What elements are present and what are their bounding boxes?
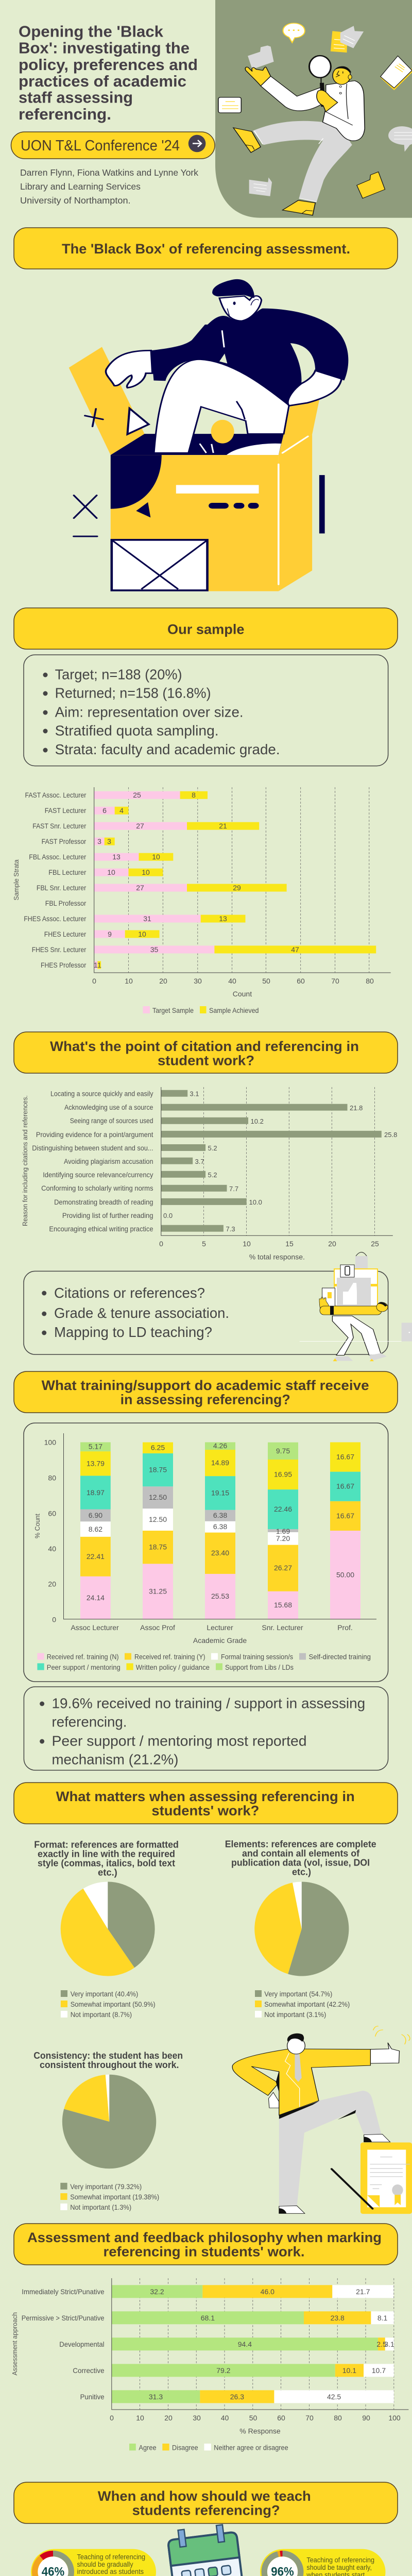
panel: training stacked bar chart: 16.67 — [336, 1453, 354, 1461]
panel: consistency pie: Very important (79.32%) — [70, 2182, 142, 2191]
panel: format pie: Not important (8.7%) — [71, 2010, 132, 2019]
bar chart: reasons for referencing: 0.0 — [163, 1212, 173, 1219]
panel: training stacked bar chart: Prof. — [337, 1623, 353, 1632]
bar chart: sample strata: FHES Lecturer — [44, 930, 87, 938]
title: referencing. — [19, 105, 111, 123]
bar chart: sample strata: 1 — [94, 961, 98, 969]
bar chart: reasons for referencing: 0 — [159, 1240, 163, 1248]
panel: training stacked bar chart: 7.20 — [276, 1534, 290, 1543]
stacked bar chart: assessment philosophy: 94.4 — [238, 2340, 252, 2348]
panel: training stacked bar chart: 50.00 — [336, 1570, 354, 1579]
stacked bar chart: assessment philosophy: 70 — [305, 2414, 314, 2422]
illustration: man giving thumbs up — [232, 2026, 412, 2214]
panel: elements pie: Not important (3.1%) — [264, 2010, 326, 2019]
panel: training stacked bar chart: 0 — [52, 1616, 56, 1624]
stat pill: gradually introduced 46%: should be gradually — [77, 2561, 133, 2568]
bar chart: reasons for referencing: 20 — [328, 1240, 336, 1248]
bar chart: reasons for referencing: 10.2 — [250, 1117, 264, 1125]
stacked bar chart: assessment philosophy: 50 — [249, 2414, 257, 2422]
bar chart: reasons for referencing: Encouraging ethical writing practice — [49, 1225, 153, 1233]
bar chart: reasons for referencing: 5.2 — [208, 1144, 217, 1152]
conference pill — [11, 132, 215, 159]
bar chart: sample strata: 20 — [159, 977, 167, 985]
bar chart: reasons for referencing: Reason for including citations and references. — [22, 1095, 29, 1226]
stat pill: taught early 96%: Teaching of referencing — [306, 2556, 374, 2564]
title: policy, preferences and — [19, 56, 198, 74]
panel: training stacked bar chart: 22.41 — [87, 1552, 105, 1561]
stacked bar chart: assessment philosophy: 8.1 — [377, 2314, 388, 2322]
panel: format pie — [34, 1839, 179, 2019]
bar chart: sample strata: 27 — [136, 884, 144, 892]
bar chart: reasons for referencing: 25 — [371, 1240, 379, 1248]
bar chart: sample strata: 4 — [119, 806, 124, 815]
bar chart: sample strata: 8 — [192, 791, 196, 799]
bar chart: sample strata: Count — [233, 990, 252, 998]
title: staff assessing — [19, 89, 133, 107]
stacked bar chart: assessment philosophy: 100 — [388, 2414, 401, 2422]
panel: training stacked bar chart: 40 — [48, 1545, 56, 1553]
stacked bar chart: assessment philosophy: Punitive — [80, 2393, 105, 2401]
stacked bar chart: assessment philosophy: 10.1 — [342, 2366, 356, 2375]
stacked bar chart: assessment philosophy: 20 — [164, 2414, 173, 2422]
stacked bar chart: assessment philosophy: 32.2 — [150, 2287, 164, 2296]
panel: training stacked bar chart: 80 — [48, 1473, 56, 1482]
legend: Self-directed training — [309, 1653, 371, 1661]
panel: consistency pie: Not important (1.3%) — [70, 2203, 131, 2211]
heading: our sample: Our sample — [167, 622, 244, 637]
bar chart: sample strata: 25 — [133, 791, 141, 799]
bar chart: reasons for referencing: Distinguishing between student and sou... — [32, 1144, 153, 1152]
stacked bar chart: assessment philosophy: 68.1 — [201, 2314, 215, 2322]
stacked bar chart: assessment philosophy: Immediately Strict/Punative — [22, 2287, 105, 2296]
bar chart: sample strata: FAST Lecturer — [45, 806, 87, 815]
title — [19, 23, 198, 123]
bar chart: sample strata: 0 — [92, 977, 96, 985]
panel: training stacked bar chart: 6.90 — [89, 1511, 102, 1519]
heading: training and support: What training/support do academic staff receive — [42, 1378, 369, 1393]
bar chart: reasons for referencing: Demonstrating breadth of reading — [54, 1198, 153, 1206]
bar chart: reasons for referencing: Seeing range of sources used — [70, 1116, 153, 1125]
stacked bar chart: assessment philosophy: 60 — [277, 2414, 285, 2422]
panel: format pie: Very important (40.4%) — [71, 1990, 138, 1998]
bar chart: reasons for referencing: 7.7 — [229, 1185, 238, 1193]
heading: assessment philosophy — [14, 2224, 398, 2265]
bar chart: sample strata: FAST Snr. Lecturer — [32, 822, 87, 830]
panel: training stacked bar chart: 18.75 — [149, 1465, 167, 1473]
authors — [20, 167, 198, 206]
panel: training stacked bar chart: Assoc Prof — [140, 1623, 175, 1632]
bar chart: sample strata: 3 — [97, 837, 101, 845]
panel: training stacked bar chart: Academic Grade — [193, 1636, 247, 1645]
panel: training bullets: 19.6% received no training / support in assessing — [52, 1695, 365, 1711]
panel: elements pie — [225, 1839, 376, 2019]
panel: training stacked bar chart: % Count — [34, 1514, 41, 1538]
bar chart: sample strata: FHES Assoc. Lecturer — [24, 914, 87, 923]
panel: elements pie: Elements: references are complete — [225, 1839, 376, 1850]
illustration: man with magnifier — [218, 23, 412, 215]
authors: University of Northampton. — [20, 195, 131, 206]
bar chart: reasons for referencing: 3.1 — [190, 1090, 199, 1097]
bar chart: sample strata: 40 — [228, 977, 236, 985]
stacked bar chart: assessment philosophy: 23.8 — [331, 2314, 345, 2322]
bar chart: reasons for referencing: 10.0 — [249, 1198, 262, 1206]
panel: training stacked bar chart: 12.50 — [149, 1515, 167, 1523]
title: practices of academic — [19, 72, 186, 90]
stacked bar chart: assessment philosophy: 90 — [362, 2414, 370, 2422]
bar chart: sample strata: 27 — [136, 822, 144, 830]
bar chart: sample strata: Sample Achieved — [209, 1006, 259, 1014]
bar chart: sample strata: 60 — [297, 977, 305, 985]
bar chart: reasons for referencing: 21.8 — [350, 1104, 363, 1112]
bar chart: reasons for referencing: 5 — [202, 1240, 206, 1248]
bar chart: sample strata: FHES Professor — [41, 961, 87, 969]
bar chart: sample strata: FHES Snr. Lecturer — [32, 945, 87, 954]
panel: consistency pie — [33, 2050, 183, 2211]
stacked bar chart: assessment philosophy: 30 — [193, 2414, 201, 2422]
stacked bar chart: assessment philosophy: 40 — [221, 2414, 229, 2422]
bar chart: sample strata: FAST Professor — [42, 837, 87, 845]
bar chart: reasons for referencing: Conforming to scholarly writing norms — [41, 1184, 153, 1192]
heading: when and how to teach: When and how should we teach — [98, 2488, 311, 2504]
bar chart: reasons for referencing — [22, 1087, 397, 1261]
heading: when and how to teach — [14, 2482, 398, 2523]
heading: what matters: students' work? — [151, 1803, 259, 1819]
panel: sample bullets: Target; n=188 (20%) — [55, 666, 182, 682]
bar chart: sample strata: 10 — [142, 868, 150, 876]
panel: citation bullets: Mapping to LD teaching? — [54, 1324, 212, 1340]
bar chart: reasons for referencing: 15 — [285, 1240, 294, 1248]
bar chart: sample strata: FBL Lecturer — [48, 868, 87, 876]
panel: training stacked bar chart: 22.46 — [274, 1505, 292, 1513]
title: Box': investigating the — [19, 39, 190, 57]
heading: training and support — [14, 1371, 398, 1413]
panel: training bullets: referencing. — [52, 1714, 127, 1730]
panel: consistency pie: Somewhat important (19.38%) — [70, 2193, 159, 2201]
title: Opening the 'Black — [19, 23, 164, 40]
bar chart: sample strata: 13 — [219, 914, 227, 923]
legend: Peer support / mentoring — [47, 1663, 121, 1671]
heading: point of citation: student work? — [158, 1053, 254, 1069]
panel: training stacked bar chart — [24, 1423, 388, 1682]
panel: training stacked bar chart: 16.95 — [274, 1470, 292, 1479]
bar chart: sample strata: FBL Snr. Lecturer — [37, 884, 87, 892]
panel: training stacked bar chart: 9.75 — [276, 1447, 290, 1455]
panel: citation bullets: Citations or references? — [54, 1285, 205, 1301]
stat pill: gradually introduced 46%: Teaching of referencing — [77, 2553, 145, 2561]
bar chart: reasons for referencing: 5.2 — [208, 1171, 217, 1179]
stacked bar chart: assessment philosophy: 10 — [136, 2414, 144, 2422]
stat pill: taught early 96%: should be taught early, — [306, 2564, 372, 2571]
stacked bar chart: assessment philosophy: 0 — [110, 2414, 114, 2422]
heading: what matters: What matters when assessing referencing in — [56, 1789, 355, 1804]
stat pill: gradually introduced 46%: introduced as students — [77, 2568, 144, 2575]
panel: format pie: exactly in line with the required — [38, 1849, 175, 1859]
bar chart: sample strata: FBL Professor — [45, 899, 87, 907]
panel: training stacked bar chart: 18.75 — [149, 1543, 167, 1551]
panel: training stacked bar chart: 24.14 — [87, 1594, 105, 1602]
panel: training stacked bar chart: 20 — [48, 1580, 56, 1588]
illustration: person carrying boxes — [300, 1252, 412, 1361]
panel: citation bullets: Grade & tenure association. — [54, 1305, 229, 1321]
panel: training bullets: mechanism (21.2%) — [52, 1751, 178, 1767]
panel: training stacked bar chart: Assoc Lecturer — [71, 1623, 119, 1632]
legend: Received ref. training (Y) — [134, 1653, 205, 1661]
header panel: title block — [11, 23, 215, 206]
panel: training stacked bar chart: 31.25 — [149, 1587, 167, 1595]
legend: Support from Libs / LDs — [225, 1663, 294, 1671]
heading: point of citation — [14, 1032, 398, 1073]
bar chart: sample strata: Target Sample — [152, 1006, 194, 1014]
authors: Library and Learning Services — [20, 181, 141, 192]
panel: training stacked bar chart: 5.17 — [89, 1443, 102, 1451]
panel: training stacked bar chart: 18.97 — [87, 1488, 105, 1497]
stacked bar chart: assessment philosophy: 46.0 — [261, 2287, 274, 2296]
stacked bar chart: assessment philosophy: Disagree — [172, 2443, 198, 2451]
panel: header illustration — [215, 0, 412, 218]
bar chart: sample strata: 10 — [107, 868, 115, 876]
panel: training stacked bar chart: 14.89 — [211, 1459, 229, 1467]
panel: elements pie: and contain all elements of — [242, 1849, 360, 1859]
bar chart: sample strata: Sample Strata — [13, 859, 20, 901]
heading: our sample — [14, 608, 398, 649]
bar chart: reasons for referencing: 10 — [243, 1240, 251, 1248]
panel: training stacked bar chart: 16.67 — [336, 1512, 354, 1520]
bar chart: sample strata: 31 — [143, 914, 151, 923]
panel: training stacked bar chart: 26.27 — [274, 1564, 292, 1572]
legend: Written policy / guidance — [136, 1663, 210, 1671]
heading: training and support: in assessing referencing? — [121, 1392, 290, 1408]
panel: format pie: style (commas, italics, bold text — [38, 1858, 175, 1868]
panel: format pie: Format: references are formatted — [34, 1839, 179, 1850]
panel: training stacked bar chart: 8.62 — [89, 1525, 102, 1533]
bar chart: sample strata: 13 — [112, 853, 121, 861]
panel: sample bullets: Aim: representation over size. — [55, 704, 244, 720]
panel: elements pie: publication data (vol, issue, DOI — [231, 1857, 370, 1868]
bar chart: sample strata: 10 — [152, 853, 160, 861]
panel: training stacked bar chart: 25.53 — [211, 1592, 229, 1600]
stacked bar chart: assessment philosophy: Corrective — [73, 2366, 105, 2375]
conference pill: UON T&L Conference '24 — [21, 138, 180, 154]
bar chart: sample strata: 70 — [331, 977, 339, 985]
panel: format pie: Somewhat important (50.9%) — [71, 2000, 156, 2008]
panel: sample bullets: Stratified quota sampling. — [55, 722, 219, 739]
panel: citation bullets — [24, 1271, 388, 1354]
panel: consistency pie: consistent throughout the work. — [40, 2060, 179, 2070]
authors: Darren Flynn, Fiona Watkins and Lynne York — [20, 167, 198, 178]
stacked bar chart: assessment philosophy: 26.3 — [230, 2393, 244, 2401]
panel: training stacked bar chart: 6.38 — [213, 1511, 227, 1519]
stacked bar chart: assessment philosophy: 3.1 — [384, 2340, 394, 2348]
bar chart: sample strata — [13, 787, 391, 1014]
bar chart: reasons for referencing: Identifying source relevance/currency — [43, 1171, 153, 1179]
stacked bar chart: assessment philosophy: 42.5 — [327, 2393, 341, 2401]
stacked bar chart: assessment philosophy: % Response — [239, 2427, 281, 2435]
bar chart: sample strata: FAST Assoc. Lecturer — [25, 791, 87, 799]
icon: calendar — [167, 2523, 245, 2576]
panel: elements pie: etc.) — [292, 1867, 311, 1877]
stacked bar chart: assessment philosophy: Assessment approach — [11, 2312, 19, 2376]
bar chart: sample strata: 3 — [107, 837, 111, 845]
panel: training stacked bar chart: 4.26 — [213, 1442, 227, 1450]
bar chart: reasons for referencing: 3.7 — [195, 1158, 204, 1165]
panel: sample bullets: Returned; n=158 (16.8%) — [55, 685, 211, 701]
panel: training stacked bar chart: 13.79 — [87, 1459, 105, 1467]
stacked bar chart: assessment philosophy: Permissive > Strict/Punative — [22, 2314, 105, 2322]
bar chart: reasons for referencing: 25.8 — [384, 1131, 397, 1139]
panel: training stacked bar chart: 60 — [48, 1510, 56, 1518]
stacked bar chart: assessment philosophy: Agree — [139, 2443, 157, 2451]
panel: training stacked bar chart: Lecturer — [207, 1623, 233, 1632]
stat pill: gradually introduced 46% — [31, 2549, 156, 2576]
bar chart: sample strata: FBL Assoc. Lecturer — [29, 853, 87, 861]
bar chart: reasons for referencing: 7.3 — [226, 1225, 235, 1233]
panel: training stacked bar chart: 15.68 — [274, 1601, 292, 1609]
panel: training stacked bar chart: Snr. Lecturer — [262, 1623, 303, 1632]
heading: point of citation: What's the point of citation and referencing in — [50, 1039, 359, 1054]
bar chart: sample strata: 21 — [219, 822, 227, 830]
heading: assessment philosophy: referencing in students' work. — [103, 2244, 305, 2260]
illustration: person climbing into a box — [69, 279, 348, 591]
bar chart: reasons for referencing: % total response. — [249, 1253, 305, 1261]
bar chart: sample strata: 30 — [194, 977, 202, 985]
panel: training bullets — [24, 1687, 388, 1770]
stacked bar chart: assessment philosophy: Neither agree or disagree — [214, 2443, 288, 2451]
stacked bar chart: assessment philosophy: 79.2 — [216, 2366, 231, 2375]
heading: when and how to teach: students referencing? — [132, 2502, 280, 2518]
panel: training stacked bar chart: 23.40 — [211, 1549, 229, 1557]
stacked bar chart: assessment philosophy: Developmental — [59, 2340, 105, 2348]
panel: elements pie: Very important (54.7%) — [264, 1990, 332, 1998]
stacked bar chart: assessment philosophy: 21.7 — [356, 2287, 370, 2296]
stat pill: taught early 96% — [260, 2549, 385, 2576]
stacked bars — [80, 1442, 360, 1619]
bar chart: sample strata: 80 — [366, 977, 374, 985]
stacked bar chart: assessment philosophy: 10.7 — [372, 2366, 386, 2375]
panel: elements pie: Somewhat important (42.2%) — [264, 2000, 350, 2008]
stacked bar chart: assessment philosophy: 80 — [334, 2414, 342, 2422]
bar chart: sample strata: 47 — [291, 945, 299, 954]
panel: training stacked bar chart: 1.69 — [276, 1527, 290, 1535]
panel: format pie: etc.) — [98, 1868, 117, 1878]
panel: training stacked bar chart: 6.25 — [151, 1444, 165, 1452]
legend: Received ref. training (N) — [47, 1653, 119, 1661]
stacked bar chart: assessment philosophy: 31.3 — [149, 2393, 163, 2401]
legend: Formal training session/s — [221, 1653, 293, 1661]
bar chart: sample strata: 6 — [102, 806, 107, 815]
panel: training stacked bar chart: 12.50 — [149, 1493, 167, 1501]
bar chart: reasons for referencing: Providing evidence for a point/argument — [36, 1130, 153, 1139]
panel: consistency pie: Consistency: the student has been — [33, 2050, 183, 2061]
panel: sample bullets: Strata: faculty and academic grade. — [55, 741, 280, 757]
bar chart: sample strata: 35 — [150, 945, 158, 954]
heading: black box: The 'Black Box' of referencing assessment. — [62, 241, 350, 257]
bar chart: reasons for referencing: Providing list of further reading — [62, 1211, 153, 1219]
bar chart: sample strata: 10 — [125, 977, 133, 985]
stacked bar chart: assessment philosophy — [11, 2278, 408, 2451]
legend — [37, 1653, 371, 1671]
bar chart: reasons for referencing: Locating a source quickly and easily — [50, 1089, 153, 1097]
stacked bar chart: assessment philosophy: 2.5 — [376, 2340, 387, 2348]
bar chart: reasons for referencing: Acknowledging use of a source — [64, 1103, 153, 1111]
panel: training stacked bar chart: 16.67 — [336, 1482, 354, 1490]
heading: black box — [14, 228, 398, 269]
panel: training stacked bar chart: 19.15 — [211, 1489, 229, 1497]
bar chart: sample strata: 10 — [138, 930, 146, 938]
bar chart: sample strata: 1 — [97, 961, 101, 969]
panel: training stacked bar chart: 100 — [44, 1438, 56, 1446]
heading: assessment philosophy: Assessment and feedback philosophy when marking — [27, 2230, 382, 2245]
heading: what matters — [14, 1783, 398, 1824]
bar chart: reasons for referencing: Avoiding plagiarism accusation — [64, 1157, 153, 1165]
bar chart: sample strata: 9 — [108, 930, 112, 938]
panel: training bullets: Peer support / mentoring most reported — [52, 1733, 307, 1749]
panel: sample bullets — [24, 655, 388, 766]
bar chart: sample strata: 29 — [233, 884, 241, 892]
panel: training stacked bar chart: 6.38 — [213, 1522, 227, 1531]
bar chart: sample strata: 50 — [262, 977, 270, 985]
